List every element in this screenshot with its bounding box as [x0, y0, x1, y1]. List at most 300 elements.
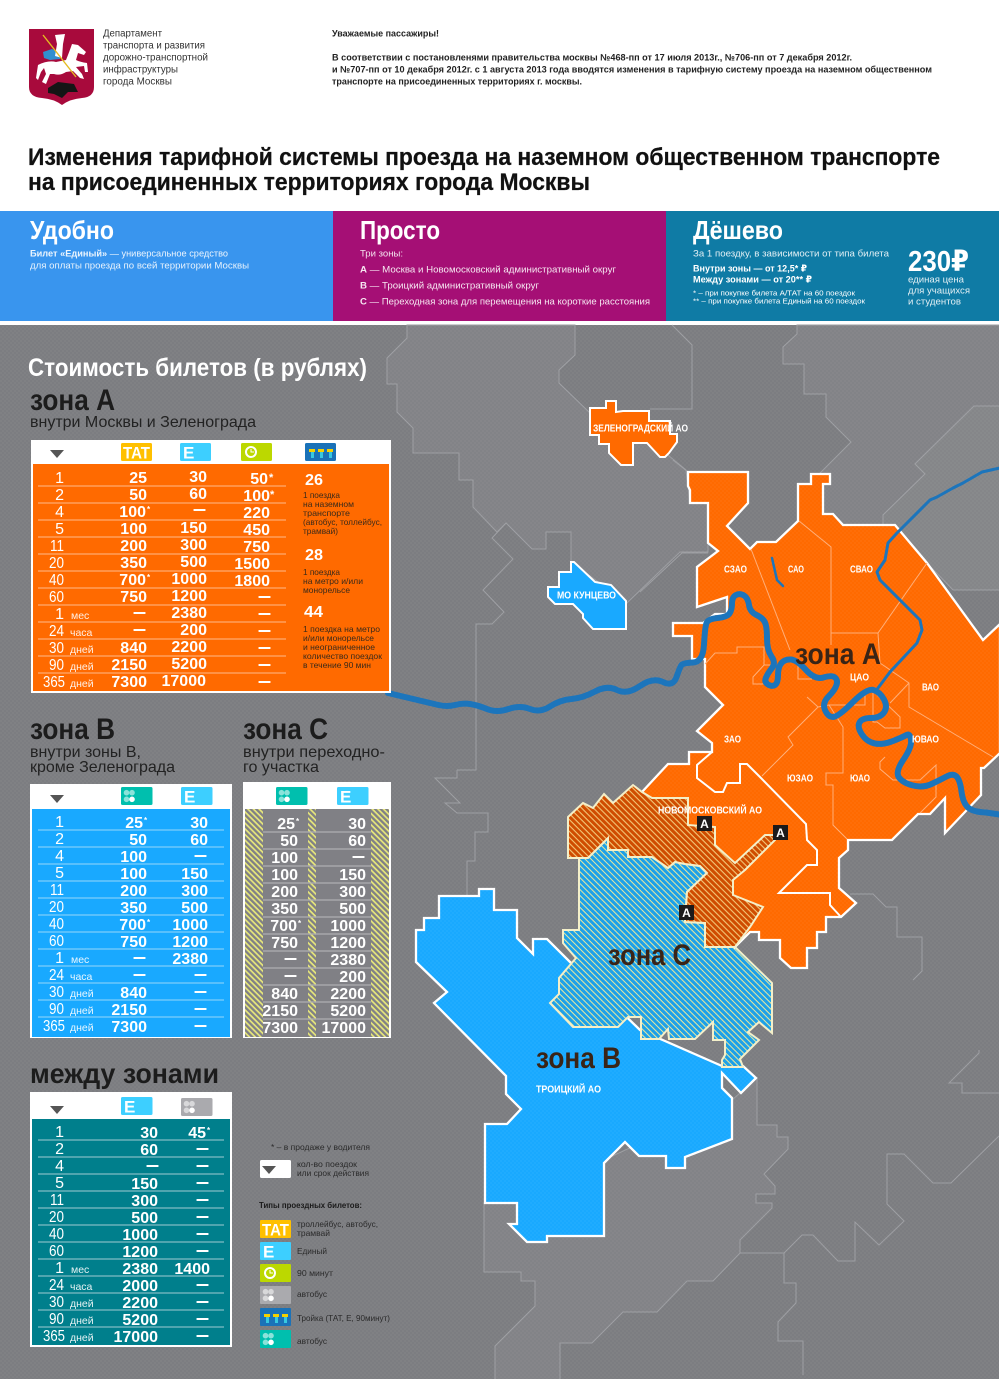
heading: ticket cost: Стоимость билетов (в рублях)	[28, 354, 367, 382]
title	[28, 144, 940, 196]
table: zone B: 100	[120, 849, 147, 866]
table: zone C: 200	[271, 884, 298, 901]
panel: Удобно: Удобно	[30, 215, 114, 245]
table: zone A: 30	[49, 640, 64, 657]
heading: zone A: зона А	[30, 384, 115, 417]
department name: инфраструктуры	[103, 64, 178, 76]
icon: grey bus ticket	[181, 1098, 212, 1116]
title: Изменения тарифной системы проезда на наземном общественном транспорте	[28, 144, 940, 171]
table: zone A: 100	[119, 504, 146, 521]
title: на присоединенных территориях города Москвы	[28, 169, 590, 196]
district labels: ЗАО	[724, 734, 741, 746]
table: zone A: 40	[49, 572, 64, 589]
zone A markers: A	[700, 817, 709, 831]
panel: Дёшево: для учащихся	[908, 286, 970, 296]
table: between zones: 2380	[122, 1261, 158, 1278]
department name: Департамент	[103, 28, 162, 40]
table: between zones: 2	[55, 1141, 64, 1158]
district labels: СЗАО	[724, 564, 747, 576]
table: zone A: 500	[180, 554, 207, 571]
table: between zones: 2000	[122, 1278, 158, 1295]
zone A inner boundary	[697, 752, 841, 917]
table: between zones: —	[197, 1143, 208, 1155]
panel: Дёшево: и студентов	[908, 296, 961, 308]
table: zone B: дней	[70, 1005, 94, 1017]
table: between zones: —	[197, 1313, 208, 1325]
table: zone A: мес	[71, 610, 89, 622]
table: zone A: *	[269, 472, 274, 484]
table: zone C: —	[285, 953, 296, 965]
icon: teal bus ticket	[260, 1330, 291, 1348]
icon: Единый ticket	[181, 787, 212, 806]
Novomoskovsky hatched area	[568, 785, 775, 947]
table: zone A	[31, 440, 391, 693]
table: between zones: 1	[55, 1124, 64, 1141]
district labels: ЦАО	[850, 672, 869, 684]
legend: или срок действия	[297, 1168, 369, 1178]
table: zone A: 5	[55, 521, 64, 538]
fares note: 26	[303, 472, 382, 536]
table: between zones: 1200	[122, 1244, 158, 1261]
icon: Единый ticket: E	[183, 444, 194, 462]
table: zone B: 5	[55, 865, 64, 882]
heading: zone B: кроме Зеленограда	[30, 759, 175, 776]
fares note: 28: на метро и/или	[303, 576, 363, 586]
table: zone A: 700	[119, 572, 146, 589]
table: between zones: 30	[140, 1125, 158, 1142]
table: zone B: —	[195, 1003, 206, 1015]
table: between zones: —	[197, 1194, 208, 1206]
table: zone C: 750	[271, 935, 298, 952]
table: zone B: 2	[55, 831, 64, 848]
table: zone B: 7300	[111, 1019, 147, 1036]
table: between zones: —	[147, 1160, 158, 1172]
table: zone A: 60	[49, 589, 64, 606]
table: zone B: —	[134, 969, 145, 981]
table: between zones: 5200	[122, 1312, 158, 1329]
table: zone C: 500	[339, 901, 366, 918]
table: zone B: 1200	[172, 934, 208, 951]
legend: Тройка (ТАТ, Е, 90минут)	[297, 1313, 390, 1323]
table: zone A: *	[147, 505, 151, 514]
zone labels: зона А	[795, 638, 881, 671]
fares note: 26: 26	[305, 472, 323, 489]
table: between zones: —	[197, 1177, 208, 1189]
table: zone B: 50	[129, 832, 147, 849]
table: zone A: 750	[120, 589, 147, 606]
legend: автобус	[297, 1289, 328, 1299]
table: zone A: 25	[129, 470, 147, 487]
table: zone A: 50	[129, 487, 147, 504]
table: between zones: —	[197, 1160, 208, 1172]
map of Moscow zones	[0, 325, 999, 1379]
table: zone B: 60	[49, 933, 64, 950]
panel: Просто: Просто	[360, 215, 440, 245]
icon: Единый ticket: E	[184, 788, 195, 806]
table: zone B: 2150	[111, 1002, 147, 1019]
table: zone B: 200	[120, 883, 147, 900]
table: zone C	[243, 782, 391, 1038]
district labels: ЮВАО	[912, 734, 939, 746]
table: zone C: 1200	[330, 935, 366, 952]
table: zone C: *	[296, 817, 300, 826]
table: zone A: 1800	[234, 573, 270, 590]
table: zone C: 7300	[262, 1020, 298, 1037]
table: zone A: 200	[180, 622, 207, 639]
heading: zone C: внутри переходно-	[243, 744, 385, 761]
table: zone C: 2380	[330, 952, 366, 969]
icon: Единый ticket: E	[263, 1242, 274, 1262]
heading: zone A	[30, 384, 256, 431]
table: zone B: 1	[55, 950, 64, 967]
table: zone A: 840	[120, 640, 147, 657]
zone labels: зона В	[536, 1042, 621, 1075]
table: zone A: 1	[55, 606, 64, 623]
table: zone A: 1000	[171, 571, 207, 588]
legend	[259, 1142, 390, 1348]
legend: трамвай	[297, 1228, 330, 1238]
table: zone A: 4	[55, 504, 64, 521]
table: zone A: 1	[55, 470, 64, 487]
icon: TAT ticket: TAT	[123, 444, 151, 462]
zone A markers: A	[682, 906, 691, 920]
table: between zones: 90	[49, 1311, 64, 1328]
table: zone A: —	[259, 642, 270, 654]
table: zone A: 20	[49, 555, 64, 572]
icon: Единый ticket	[260, 1242, 291, 1262]
table: between zones: 60	[49, 1243, 64, 1260]
table: zone A: —	[259, 591, 270, 603]
table: zone A: 100	[243, 488, 270, 505]
zone A markers	[679, 816, 788, 920]
table: between zones: 300	[131, 1193, 158, 1210]
table: zone A: 2200	[171, 639, 207, 656]
icon: 90 minutes ticket	[241, 443, 272, 461]
fares note: 44: и неограниченное	[303, 642, 375, 652]
fares note: 44: 1 поездка на метро	[303, 624, 380, 634]
table: zone B: 90	[49, 1001, 64, 1018]
table: zone B: 840	[120, 985, 147, 1002]
zone labels	[536, 638, 881, 1075]
table: between zones: *	[207, 1126, 211, 1135]
table: zone B: 24	[49, 967, 64, 984]
table: zone B: часа	[70, 971, 93, 983]
icon: Troika ticket	[305, 443, 336, 461]
fares note: 44: в течение 90 мин	[303, 660, 371, 670]
heading: between zones: между зонами	[30, 1058, 219, 1089]
panel: Дёшево: единая цена	[908, 274, 965, 286]
table: between zones: дней	[70, 1315, 94, 1327]
heading: zone C	[243, 713, 385, 776]
table: zone C: *	[298, 919, 302, 928]
notice text: и №707-пп от 10 декабря 2012г. с 1 августа 2013 года вводятся изменения в тарифную систему проезда на наземном общественном	[332, 64, 932, 74]
panel: Удобно: Билет «Единый» — универсальное средство	[30, 248, 228, 260]
panel: Дёшево: ** – при покупке билета Единый на 60 поездок	[693, 296, 866, 306]
table: zone C: 100	[271, 850, 298, 867]
fares note: 44: количество поездок	[303, 651, 382, 661]
icon: bus ticket	[121, 787, 152, 805]
department name: города Москвы	[103, 76, 172, 88]
table: zone B: —	[195, 850, 206, 862]
table: zone A: 50	[250, 471, 268, 488]
fares note: 28: монорельсе	[303, 585, 350, 595]
table: zone A: —	[194, 504, 205, 516]
panel: Просто: C — Переходная зона для перемещения на короткие расстояния	[360, 296, 650, 308]
table: zone A: 150	[180, 520, 207, 537]
table: zone B: 500	[181, 900, 208, 917]
panel: Просто	[333, 211, 666, 321]
table: zone A: 11	[50, 538, 64, 555]
table: between zones: 150	[131, 1176, 158, 1193]
table: zone B: 700	[119, 917, 146, 934]
table: zone B: 30	[190, 815, 208, 832]
icon: Troika ticket	[260, 1308, 291, 1326]
fares note: 26: на наземном	[303, 499, 354, 509]
heading: zone C: зона С	[243, 713, 328, 746]
table: zone B: 100	[120, 866, 147, 883]
legend: Типы проездных билетов:	[259, 1200, 362, 1210]
table: between zones: —	[197, 1296, 208, 1308]
table: zone C: 100	[271, 867, 298, 884]
table: zone A: дней	[70, 661, 94, 673]
table: between zones: часа	[70, 1281, 93, 1293]
table: zone C: 2200	[330, 986, 366, 1003]
table: zone A: —	[259, 608, 270, 620]
table: zone C: 30	[348, 816, 366, 833]
table: zone A: 2	[55, 487, 64, 504]
zone B area	[416, 889, 756, 1242]
table: between zones: —	[197, 1211, 208, 1223]
heading: zone B: зона В	[30, 713, 115, 746]
district labels: ТРОИЦКИЙ АО	[536, 1082, 601, 1096]
table: between zones: 11	[50, 1192, 64, 1209]
table: between zones: мес	[71, 1264, 89, 1276]
department name: дорожно-транспортной	[103, 52, 208, 64]
table: between zones: 2200	[122, 1295, 158, 1312]
notice text: В соответствии с постановленями правительства москвы №468-пп от 17 июля 2013г., №706-пп от 7 декабря 2012г.	[332, 52, 852, 62]
Zelenograd area	[590, 401, 677, 465]
panel: Дёшево: 230₽	[908, 246, 969, 278]
table: zone A: часа	[70, 627, 93, 639]
table: zone A: 365	[43, 674, 65, 691]
table: zone B: —	[134, 952, 145, 964]
table: zone A: 220	[243, 505, 270, 522]
legend: * – в продаже у водителя	[271, 1142, 370, 1152]
legend: 90 минут	[297, 1268, 333, 1278]
heading: zone A: внутри Москвы и Зеленограда	[30, 414, 256, 431]
district labels: ЮЗАО	[787, 774, 813, 784]
table: zone B: 20	[49, 899, 64, 916]
panel: Дёшево: Между зонами — от 20** ₽	[693, 274, 812, 286]
icon: Единый ticket	[121, 1097, 152, 1116]
table: zone C: 2150	[262, 1003, 298, 1020]
table: between zones: дней	[70, 1332, 94, 1344]
Kuntsevo area	[548, 562, 626, 629]
table: between zones: 40	[49, 1226, 64, 1243]
fares note: 44	[303, 604, 382, 670]
table: zone B: 4	[55, 848, 64, 865]
table: zone A: 2380	[171, 605, 207, 622]
table: zone B: мес	[71, 954, 89, 966]
table: between zones: 500	[131, 1210, 158, 1227]
fares note: 26: транспорте	[303, 508, 350, 518]
table: zone C: 300	[339, 884, 366, 901]
table: zone B: 365	[43, 1018, 65, 1035]
icon: Единый ticket	[337, 787, 368, 806]
table: zone A: 2150	[111, 657, 147, 674]
table: zone B: —	[195, 986, 206, 998]
zone labels: зона С	[608, 939, 691, 972]
table: zone B: *	[144, 816, 148, 825]
district labels: ЗЕЛЕНОГРАДСКИЙ АО	[593, 422, 688, 434]
icon: 90 minutes ticket	[260, 1264, 291, 1282]
department name: транспорта и развития	[103, 40, 205, 52]
table: between zones: дней	[70, 1298, 94, 1310]
icon: Moscow coat of arms	[29, 29, 94, 105]
table: zone B: 150	[181, 866, 208, 883]
fares note: 28: 1 поездка	[303, 567, 340, 577]
district labels: ЮАО	[850, 774, 870, 784]
table: zone C: 350	[271, 901, 298, 918]
map dot texture	[0, 325, 999, 1379]
table: between zones: 24	[49, 1277, 64, 1294]
table: zone B: 25	[125, 815, 143, 832]
table: zone A: —	[134, 607, 145, 619]
table: zone A: 450	[243, 522, 270, 539]
table: between zones: 1	[55, 1260, 64, 1277]
table: zone A: 7300	[111, 674, 147, 691]
table: between zones: 4	[55, 1158, 64, 1175]
icon: Единый ticket: E	[340, 788, 351, 806]
legend: троллейбус, автобус,	[297, 1219, 378, 1229]
table: between zones: —	[197, 1279, 208, 1291]
legend: Единый	[297, 1246, 327, 1256]
zone A area	[642, 472, 999, 968]
table: zone C: 700	[270, 918, 297, 935]
table: zone A: —	[134, 624, 145, 636]
notice text	[332, 28, 932, 86]
table: zone A: *	[270, 489, 275, 501]
table: zone A: 24	[49, 623, 64, 640]
panel: Удобно: для оплаты проезда по всей территории Москвы	[30, 260, 249, 272]
table: zone B: —	[195, 969, 206, 981]
fares note: 28: 28	[305, 547, 323, 564]
river Moskva	[388, 594, 999, 815]
table: zone C: 840	[271, 986, 298, 1003]
heading: zone B: внутри зоны В,	[30, 744, 141, 761]
table: zone B: 750	[120, 934, 147, 951]
table: between zones: 365	[43, 1328, 65, 1345]
icon: TAT ticket: TAT	[262, 1220, 290, 1240]
heading: zone C: го участка	[243, 759, 319, 776]
zone C area	[550, 838, 772, 1067]
table: zone A: 1500	[234, 556, 270, 573]
panel: Просто: A — Москва и Новомосковский административный округ	[360, 264, 617, 276]
table: zone A: 100	[120, 521, 147, 538]
table: zone A: 5200	[171, 656, 207, 673]
table: zone B: дней	[70, 988, 94, 1000]
district borders	[705, 521, 993, 839]
table: zone A: —	[259, 676, 270, 688]
table: between zones: 30	[49, 1294, 64, 1311]
notice text: Уважаемые пассажиры!	[332, 28, 439, 38]
table: zone B: —	[195, 1020, 206, 1032]
table: zone C: 25	[277, 816, 295, 833]
panel: Дёшево: За 1 поездку, в зависимости от типа билета	[693, 248, 890, 260]
icon: Единый ticket: E	[124, 1098, 135, 1116]
table: zone A: 90	[49, 657, 64, 674]
fares note: 26: (автобус, толлейбус,	[303, 517, 382, 527]
table: zone B: 11	[50, 882, 64, 899]
table: between zones: —	[197, 1245, 208, 1257]
table: zone B: 40	[49, 916, 64, 933]
table: zone C: 17000	[322, 1020, 366, 1037]
table: zone B: *	[147, 918, 151, 927]
table: zone A: 1200	[171, 588, 207, 605]
panel: Дёшево: * – при покупке билета А/ТАТ на 60 поездок	[693, 288, 856, 298]
table: zone B: 30	[49, 984, 64, 1001]
table: zone C: 150	[339, 867, 366, 884]
district labels	[536, 422, 939, 1096]
table: between zones: —	[197, 1228, 208, 1240]
table: zone C: 1000	[330, 918, 366, 935]
department name	[103, 28, 208, 88]
table: zone A: 350	[120, 555, 147, 572]
panel: Дёшево: Дёшево	[693, 215, 783, 245]
district labels: СВАО	[850, 564, 873, 576]
table: zone A: 60	[189, 486, 207, 503]
table: zone A: 17000	[162, 673, 206, 690]
river Yauza	[877, 468, 999, 688]
table: zone A: —	[259, 659, 270, 671]
table: between zones: 20	[49, 1209, 64, 1226]
table: zone B: 350	[120, 900, 147, 917]
icon: bus ticket	[276, 787, 308, 805]
table: between zones: 45	[188, 1125, 206, 1142]
table: zone C: 200	[339, 969, 366, 986]
table: zone A: 300	[180, 537, 207, 554]
table: zone A: 200	[120, 538, 147, 555]
table: zone A: дней	[70, 678, 94, 690]
table: zone A: —	[259, 625, 270, 637]
icon: triangle key	[260, 1160, 291, 1178]
table: zone C: 50	[280, 833, 298, 850]
table: zone B	[30, 784, 232, 1038]
small canal	[772, 558, 783, 586]
zone A markers: A	[776, 826, 785, 840]
header	[28, 28, 940, 196]
district labels: МО КУНЦЕВО	[557, 590, 616, 602]
district labels: НОВОМОСКОВСКИЙ АО	[658, 804, 762, 816]
legend: автобус	[297, 1336, 328, 1346]
panel: Дёшево	[666, 211, 999, 321]
table: zone A: 30	[189, 469, 207, 486]
fares note: 26: 1 поездка	[303, 490, 340, 500]
table: between zones	[30, 1092, 232, 1347]
panel: Дёшево: Внутри зоны — от 12,5* ₽	[693, 264, 807, 274]
table: zone C: 5200	[330, 1003, 366, 1020]
legend: кол-во поездок	[297, 1159, 357, 1169]
table: between zones: 1400	[174, 1261, 210, 1278]
icon: grey bus ticket	[260, 1286, 291, 1304]
panel: Просто: B — Троицкий административный округ	[360, 280, 540, 292]
table: zone B: 300	[181, 883, 208, 900]
table: zone B: 1	[55, 814, 64, 831]
heading: zone B	[30, 713, 175, 776]
table: zone B: 1000	[172, 917, 208, 934]
table: between zones: 5	[55, 1175, 64, 1192]
district labels: ВАО	[922, 682, 939, 694]
